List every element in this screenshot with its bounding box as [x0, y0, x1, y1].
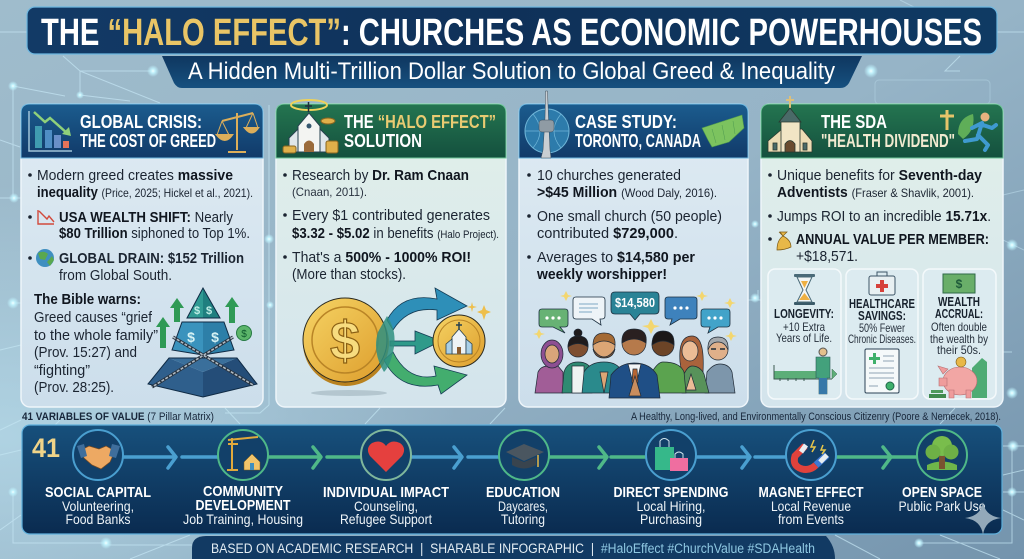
panel header: toronto	[519, 91, 748, 158]
icon: cash note: $	[956, 277, 963, 291]
pillar: social capital: Volunteering,	[62, 498, 134, 514]
card: wealth accrual	[923, 269, 996, 399]
card: healthcare savings: SAVINGS:	[858, 309, 906, 323]
footer ribbon	[192, 536, 835, 559]
text block: solution bullets: Every $1 contributed generates	[292, 207, 490, 224]
pillar: magnet effect	[758, 430, 864, 527]
icon: gold coin flowing to church: $	[330, 311, 360, 371]
text block: bible warning: to the whole family”	[34, 327, 158, 344]
person: bearded man	[582, 333, 624, 393]
pillar: education: Tutoring	[501, 511, 545, 527]
pillar: community development: DEVELOPMENT	[196, 497, 290, 514]
icon: falling bar chart	[29, 111, 72, 151]
text block: bible warning: “fighting”	[34, 362, 90, 379]
text block: bible warning: (Prov. 15:27) and	[34, 344, 137, 361]
heading: health dividend	[821, 111, 955, 151]
heading: toronto canada: TORONTO, CANADA	[575, 130, 701, 151]
panel: case study toronto	[519, 91, 748, 407]
heading: the cost of greed	[80, 111, 216, 151]
card: healthcare savings	[846, 269, 918, 399]
text block: crisis bullets: USA WEALTH SHIFT: Nearly	[59, 209, 233, 226]
pillar: individual impact: INDIVIDUAL IMPACT	[323, 484, 449, 501]
panel: SDA health dividend	[761, 96, 1003, 407]
person: central man in suit	[609, 329, 660, 398]
pillar: direct spending	[614, 430, 728, 527]
text block: crisis bullets: inequality (Price, 2025; Hickel et al., 2021).	[37, 184, 253, 201]
pillar: direct spending: Purchasing	[640, 511, 702, 527]
panel header: solution	[276, 100, 506, 158]
card: wealth accrual: the wealth by	[930, 332, 988, 346]
icon: SDA church	[768, 96, 812, 152]
pillar: community development: Job Training, Housing	[183, 511, 303, 527]
text block: toronto bullets: One small church (50 people)	[537, 208, 722, 225]
illustration: worshippers group	[535, 329, 735, 398]
pillar: magnet effect: from Events	[778, 511, 844, 527]
icon: piggy bank	[929, 357, 987, 398]
sparkle	[965, 502, 1001, 535]
pillar: magnet effect: MAGNET EFFECT	[758, 484, 864, 501]
text block: SDA bullets: Jumps ROI to an incredible 15.71x.	[777, 208, 991, 225]
icon: chained wealth pyramid: $	[241, 329, 247, 340]
heading: health dividend: THE SDA	[821, 111, 887, 132]
icon: Toronto map	[702, 115, 744, 147]
pillar: social capital	[45, 430, 151, 527]
heading: the cost of greed: THE COST OF GREED	[80, 130, 216, 151]
pillar: open space: OPEN SPACE	[902, 484, 982, 501]
pillar: education: Daycares,	[498, 498, 548, 514]
heading: health dividend: "HEALTH DIVIDEND"	[821, 130, 955, 151]
card: longevity: +10 Extra	[783, 320, 825, 334]
icon: chained wealth pyramid: $	[194, 305, 200, 317]
text block: solution bullets: $3.32 - $5.02 in benefits (Halo Project).	[292, 225, 499, 242]
pillar: open space: Public Park Use	[898, 498, 986, 514]
pillar: social capital: SOCIAL CAPITAL	[45, 484, 151, 501]
card: healthcare savings: 50% Fewer	[859, 321, 905, 335]
icon: cross, leaf and runner	[940, 110, 996, 150]
icon: chained wealth pyramid: $	[211, 329, 219, 345]
pillar: individual impact: Refugee Support	[340, 511, 432, 527]
text block: toronto bullets: weekly worshipper!	[536, 266, 667, 283]
number 41: 41	[32, 433, 60, 463]
text block: toronto bullets: 10 churches generated	[537, 167, 681, 184]
text block: solution bullets: Research by Dr. Ram Cnaan	[292, 167, 469, 184]
icon: chained wealth pyramid: $	[187, 329, 195, 345]
heading: halo effect solution	[344, 111, 496, 151]
text block: crisis bullets	[28, 167, 253, 284]
pillar: community development: COMMUNITY	[203, 483, 283, 500]
heading: halo effect solution: SOLUTION	[344, 130, 422, 151]
person: woman in hijab	[535, 340, 563, 393]
pillar: open space	[898, 430, 986, 514]
card: healthcare savings: Chronic Diseases.	[848, 332, 916, 346]
pillar: education	[486, 430, 560, 527]
text block: solution bullets: (Cnaan, 2011).	[292, 185, 367, 199]
pillar: direct spending: DIRECT SPENDING	[614, 484, 728, 501]
text block: crisis bullets: Modern greed creates massive	[37, 167, 233, 184]
panel header: health dividend	[761, 96, 1003, 158]
text block: SDA bullets: Adventists (Fraser & Shavlik, 2001).	[777, 184, 974, 201]
icon: life-extension ruler and figure	[774, 348, 837, 394]
icon: scales	[217, 113, 258, 152]
icon: medical report	[865, 349, 899, 393]
text block: toronto bullets: contributed $729,000.	[537, 225, 678, 242]
footer ribbon: BASED ON ACADEMIC RESEARCH | SHARABLE INFOGRAPHIC | #HaloEffect #ChurchValue #SDAHealth	[211, 541, 815, 556]
panel: seven pillars band	[22, 425, 1002, 535]
heading: halo effect solution: THE “HALO EFFECT”	[344, 111, 496, 132]
text block: bible warning: Greed causes “grief	[34, 309, 153, 326]
text block: crisis bullets: GLOBAL DRAIN: $152 Trillion	[59, 250, 244, 267]
pillar: individual impact	[323, 430, 449, 527]
panel: halo effect solution	[276, 100, 506, 407]
icon: chained wealth pyramid	[148, 288, 257, 397]
pillar: community development	[183, 430, 303, 527]
card: wealth accrual: their 50s.	[937, 343, 981, 357]
text block: toronto bullets: Averages to $14,580 per	[537, 249, 695, 266]
card: healthcare savings: HEALTHCARE	[849, 297, 915, 311]
heading: the cost of greed: GLOBAL CRISIS:	[80, 111, 202, 132]
person: woman with auburn hair	[680, 336, 709, 393]
text block: SDA bullets: +$18,571.	[796, 248, 858, 265]
text block: bible warning: The Bible warns:	[34, 291, 141, 308]
heading: toronto canada: CASE STUDY:	[575, 111, 677, 132]
panel header: global crisis	[21, 104, 263, 158]
person: older man	[705, 337, 735, 393]
pillar: education: EDUCATION	[486, 484, 560, 501]
panel: global crisis	[21, 104, 263, 407]
card: longevity: Years of Life.	[776, 331, 832, 345]
illustration: speech bubbles	[533, 291, 737, 341]
text block: toronto bullets: >$45 Million (Wood Daly, 2016).	[537, 184, 717, 201]
text block: crisis bullets: $80 Trillion siphoned to Top 1%.	[59, 225, 250, 242]
person: woman with bun	[562, 329, 592, 393]
connector arrows	[123, 447, 917, 468]
icon: church with halo	[283, 100, 338, 153]
text block: solution bullets: (More than stocks).	[292, 266, 406, 283]
pillar: magnet effect: Local Revenue	[771, 498, 851, 514]
card: wealth accrual: WEALTH	[938, 295, 980, 309]
pillar: individual impact: Counseling,	[354, 498, 418, 514]
icon: hourglass	[794, 274, 815, 305]
pillar: direct spending: Local Hiring,	[636, 498, 706, 514]
text block: SDA bullets	[768, 167, 991, 265]
text block: SDA bullets: Unique benefits for Seventh-day	[777, 167, 983, 184]
subtitle ribbon: A Hidden Multi-Trillion Dollar Solution to Global Greed & Inequality	[188, 58, 835, 85]
text block: bible warning: (Prov. 28:25).	[34, 379, 114, 396]
label: 41 variables of value: 41 VARIABLES OF VALUE (7 Pillar Matrix)	[22, 411, 214, 423]
text block: solution bullets	[283, 167, 499, 283]
text block: SDA bullets: ANNUAL VALUE PER MEMBER:	[796, 231, 989, 248]
text block: bible warning	[34, 291, 158, 396]
illustration: speech bubbles: $14,580	[615, 296, 655, 310]
card: longevity: LONGEVITY:	[774, 307, 834, 321]
person: man in green sweater	[650, 331, 686, 393]
text block: toronto bullets	[527, 167, 722, 283]
icon: CN tower and globe	[525, 91, 569, 158]
pillar: social capital: Food Banks	[66, 511, 130, 527]
icon: medical kit	[869, 272, 895, 295]
text block: crisis bullets: from Global South.	[59, 267, 172, 284]
heading: toronto canada	[575, 111, 701, 151]
text block: solution bullets: That's a 500% - 1000% ROI!	[292, 249, 471, 266]
icon: chained wealth pyramid: $	[206, 305, 212, 317]
card: wealth accrual: ACCRUAL:	[935, 307, 983, 321]
card: longevity	[768, 269, 841, 399]
icon: gold coin flowing to church	[303, 288, 491, 396]
card: wealth accrual: Often double	[931, 320, 987, 334]
